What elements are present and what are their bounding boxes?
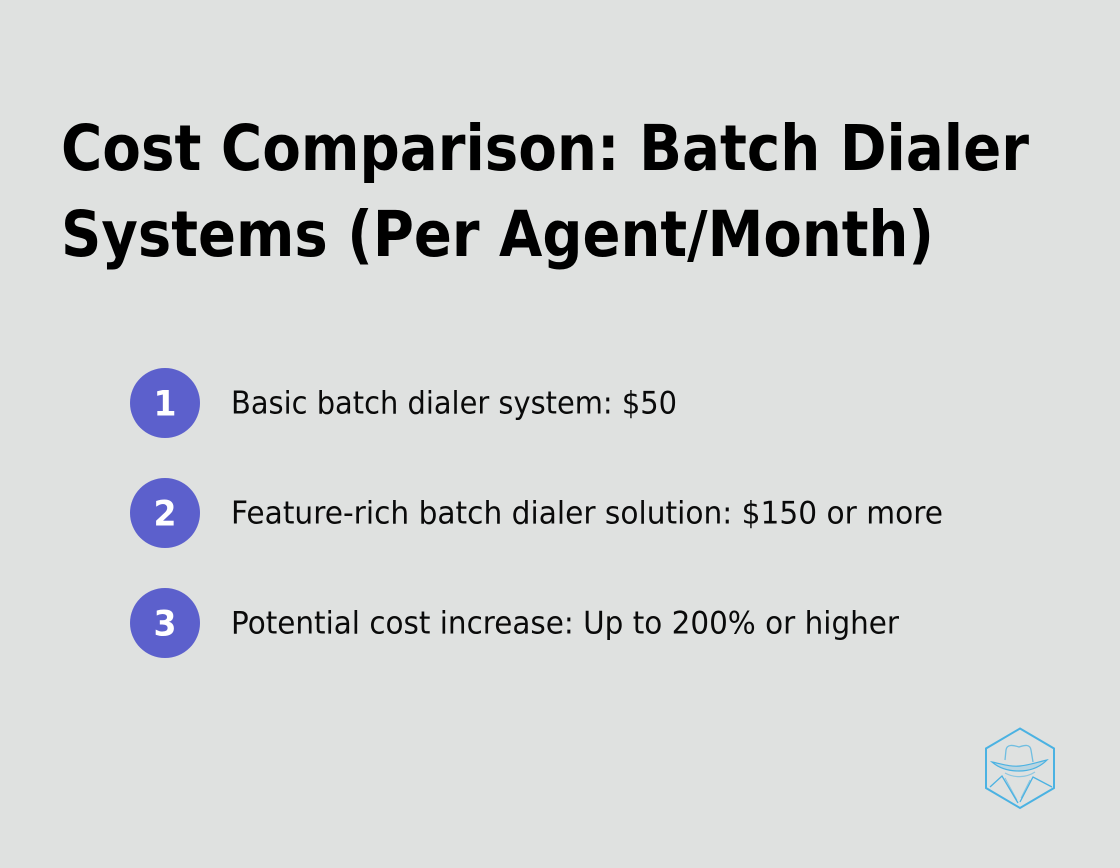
list item 1: 1 — [154, 384, 176, 424]
title: Systems (Per Agent/Month) — [61, 198, 934, 271]
list item 2: 2 — [154, 494, 176, 534]
list item 1 — [130, 368, 677, 438]
icon: logo, hexagon with spy hat — [986, 728, 1054, 808]
list item 3: Potential cost increase: Up to 200% or higher — [231, 606, 899, 642]
title: Cost Comparison: Batch Dialer — [61, 112, 1029, 185]
list item 3: 3 — [154, 604, 176, 644]
list item 1: Basic batch dialer system: $50 — [231, 386, 677, 422]
list item 3 — [130, 588, 899, 658]
title — [61, 112, 1029, 271]
list item 2: Feature-rich batch dialer solution: $150 or more — [231, 496, 943, 532]
list item 2 — [130, 478, 943, 548]
